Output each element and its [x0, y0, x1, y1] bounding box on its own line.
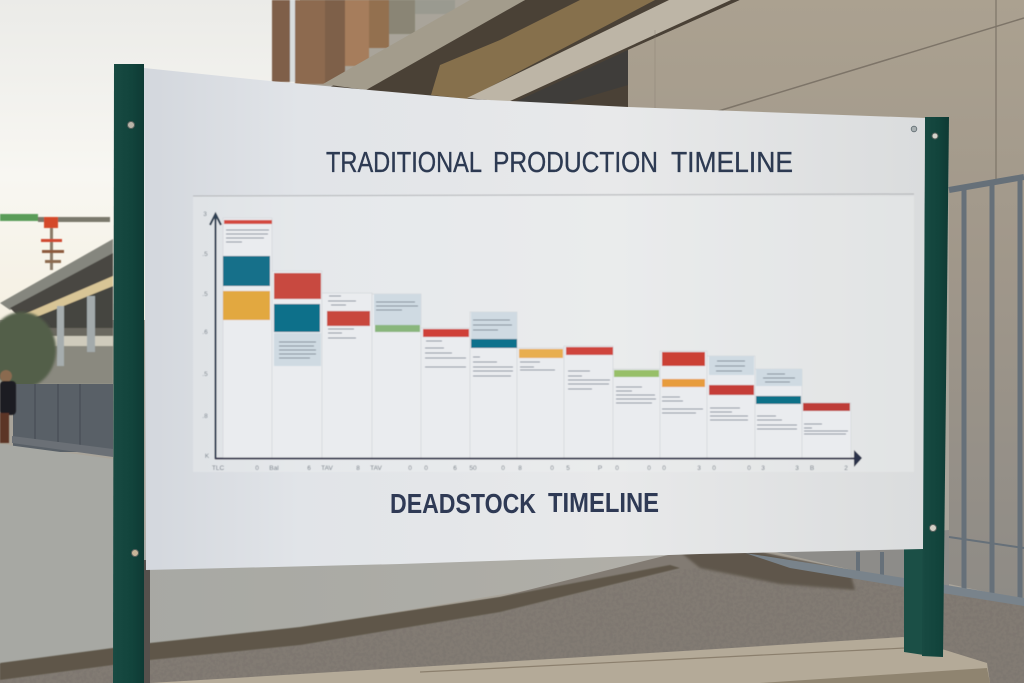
title: traditional production timeline: PRODUCTION	[493, 147, 658, 179]
x-axis tick labels: B	[810, 465, 814, 472]
y-axis tick labels: .5	[202, 371, 208, 378]
wooden plank	[150, 637, 990, 683]
right sign post	[904, 117, 949, 657]
wall seen below the board	[745, 530, 949, 590]
building overhang with beams	[323, 0, 740, 112]
board screw	[911, 126, 917, 132]
sky background	[0, 0, 300, 320]
illegible small copy lines	[226, 230, 848, 434]
construction crane	[0, 214, 110, 270]
y-axis tick labels: K	[205, 453, 210, 460]
left shelter roof and columns	[0, 239, 113, 384]
x-axis tick labels: TLC	[212, 465, 224, 472]
y-axis tick labels	[202, 211, 210, 460]
x-axis tick labels: Bal	[269, 465, 279, 472]
x-axis tick labels: 3	[697, 465, 701, 472]
x-axis tick labels: 3	[761, 465, 765, 472]
y-axis tick labels: 3	[203, 211, 207, 218]
x-axis tick labels: 8	[518, 465, 522, 472]
x-axis tick labels: P	[598, 465, 602, 472]
x-axis tick labels: TAV	[370, 465, 382, 472]
chart panel	[193, 194, 914, 472]
sign board panel	[144, 68, 925, 570]
metal fence at right	[858, 177, 1024, 604]
column outlines	[223, 218, 851, 459]
title: traditional production timeline	[326, 147, 793, 179]
coloured stage bars	[223, 220, 850, 411]
x-axis tick labels: 2	[844, 465, 848, 472]
x-axis tick labels: 8	[356, 465, 360, 472]
pavement under sign	[113, 540, 690, 650]
x-axis tick labels: 0	[550, 465, 554, 472]
x-axis tick labels: 5	[566, 465, 570, 472]
copper tower in background	[272, 0, 455, 84]
x-axis tick labels: 0	[747, 465, 751, 472]
x-axis tick labels: 0	[662, 465, 666, 472]
person at left	[0, 370, 16, 443]
x-axis tick labels: 6	[453, 465, 457, 472]
title: deadstock timeline	[390, 487, 659, 519]
x-axis tick labels: TAV	[321, 465, 333, 472]
x-axis tick labels: 0	[255, 465, 259, 472]
x-axis tick labels: 0	[408, 465, 412, 472]
title: deadstock timeline: TIMELINE	[548, 487, 659, 518]
x-axis tick labels: 0	[424, 465, 428, 472]
left sign post	[113, 64, 150, 683]
title: deadstock timeline: DEADSTOCK	[390, 488, 536, 519]
y-axis tick labels: .5	[202, 251, 208, 258]
x-axis tick labels: 0	[712, 465, 716, 472]
x-axis tick labels: 0	[647, 465, 651, 472]
grey-blue note boxes	[274, 294, 802, 386]
y-axis arrow	[210, 214, 221, 459]
y-axis tick labels: .6	[202, 329, 208, 336]
x-axis arrow	[215, 450, 862, 467]
x-axis tick labels: 3	[795, 465, 799, 472]
title: traditional production timeline: TRADITIONAL	[326, 147, 482, 179]
earth mound behind gravel	[680, 552, 855, 590]
x-axis tick labels: 50	[469, 465, 477, 472]
x-axis tick labels	[212, 465, 848, 472]
x-axis tick labels: 0	[615, 465, 619, 472]
y-axis tick labels: .8	[202, 413, 208, 420]
gravel	[0, 552, 1024, 683]
x-axis tick labels: 6	[307, 465, 311, 472]
pavement left of sign	[0, 444, 113, 665]
fence base rail	[745, 553, 1024, 606]
wall joints	[655, 0, 1024, 180]
trees	[0, 312, 56, 388]
y-axis tick labels: .5	[202, 291, 208, 298]
x-axis tick labels: 0	[501, 465, 505, 472]
title: traditional production timeline: TIMELINE	[671, 147, 793, 179]
left fence	[12, 384, 113, 457]
dark curb edge	[0, 565, 680, 680]
building wall	[628, 0, 1024, 600]
gravel texture	[0, 556, 1024, 683]
